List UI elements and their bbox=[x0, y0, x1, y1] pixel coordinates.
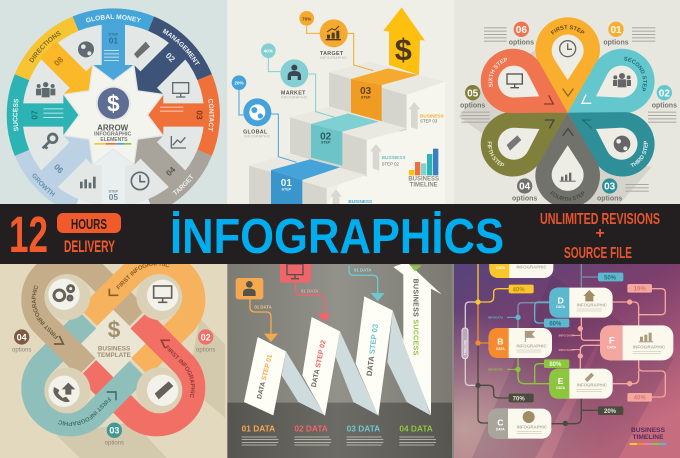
icon: gears bbox=[54, 286, 74, 301]
icon: clock bbox=[131, 172, 149, 190]
badge: 01 options: options bbox=[603, 39, 629, 46]
side label: TIMELINE bbox=[463, 339, 467, 355]
node: global bbox=[232, 75, 271, 139]
icon: monitor bbox=[154, 286, 172, 302]
badge: 04 options: 04 bbox=[519, 182, 531, 193]
step labels bbox=[29, 32, 205, 202]
small node labels: INFODATA bbox=[488, 368, 504, 372]
panel: stair steps infographic bbox=[226, 0, 452, 204]
percentage pills: 60% bbox=[549, 321, 562, 327]
step 3 block: STEP bbox=[361, 96, 371, 100]
panel: folded paper data steps bbox=[225, 264, 452, 458]
chevrons bbox=[544, 89, 592, 136]
filler text blocks bbox=[461, 27, 676, 192]
business success arrow: BUSINESS SUCCESS bbox=[412, 279, 419, 356]
step labels: STEP bbox=[109, 190, 119, 194]
woven bands bbox=[34, 263, 193, 424]
data label 04 bbox=[399, 423, 436, 445]
icon: people bbox=[613, 73, 631, 87]
icon: people bbox=[36, 82, 55, 97]
icon: monitor bbox=[173, 83, 189, 97]
dollar and template title: $ bbox=[108, 316, 121, 342]
icon: phone and arrow bbox=[53, 383, 75, 402]
badge: 03 options: options bbox=[105, 440, 124, 446]
long shadows bbox=[57, 319, 226, 458]
paper step 2 bbox=[302, 317, 340, 416]
ring labels: MANAGEMENT bbox=[162, 28, 200, 65]
card: A: INFOGRAPHIC bbox=[516, 265, 547, 270]
data label 02: 02 DATA bbox=[294, 423, 328, 433]
badge: 03 options bbox=[597, 178, 622, 203]
icon: pencil bbox=[134, 42, 150, 58]
paper step 3: DATA STEP 03 bbox=[365, 323, 380, 377]
icon: line chart bbox=[171, 136, 186, 148]
small arrows and business labels bbox=[330, 102, 444, 205]
centre dollar badge: $ bbox=[107, 91, 120, 117]
yellow arrow with dollar bbox=[383, 7, 425, 75]
card: C: INFOGRAPHIC bbox=[517, 425, 547, 430]
icon: clock bbox=[560, 41, 576, 57]
ring segments bbox=[7, 8, 220, 222]
node: target: INFOGRAPHIC bbox=[320, 56, 347, 60]
business timeline title bbox=[631, 427, 666, 441]
icon: monitor tile with connector bbox=[280, 259, 331, 322]
node: market bbox=[261, 43, 308, 100]
ring labels: GROWTH bbox=[32, 174, 56, 196]
percentage pills: 40% bbox=[634, 396, 646, 402]
badge: 04 options: options bbox=[12, 347, 31, 353]
icon: monitor bbox=[507, 74, 522, 88]
icon: person tile with connector: 01 DATA bbox=[254, 305, 273, 310]
badge: 03 options: 03 bbox=[604, 182, 616, 193]
panel: business timeline flowchart bbox=[452, 264, 680, 458]
node: market: INFOGRAPHIC bbox=[281, 96, 308, 100]
percentage pills: 10% bbox=[634, 287, 646, 293]
badge: 02 options: 02 bbox=[201, 332, 211, 342]
icon: bar chart bbox=[80, 177, 96, 188]
badge: 02 options: options bbox=[196, 347, 215, 353]
badge: 05 options: 05 bbox=[467, 88, 479, 99]
ring labels: DIRECTIONS bbox=[29, 31, 61, 63]
badge: 03 options bbox=[105, 423, 124, 446]
step labels: 08 bbox=[52, 54, 66, 68]
paper step 2: DATA STEP 02 bbox=[311, 340, 328, 388]
step 2 block: STEP bbox=[321, 141, 331, 145]
percentage pills: 20% bbox=[604, 409, 617, 415]
badge: 01 options: 01 bbox=[610, 25, 622, 36]
infographics title: İNFOGRAPHİCS bbox=[170, 210, 504, 264]
ring labels: TARGET bbox=[172, 174, 193, 195]
hours pill bbox=[57, 213, 121, 233]
chevrons bbox=[54, 289, 170, 400]
node: global: INFOGRAPHIC bbox=[244, 135, 271, 139]
centre dollar badge bbox=[96, 86, 131, 121]
card: E: INFOGRAPHIC bbox=[577, 383, 607, 388]
node: global: GLOBAL bbox=[243, 130, 268, 136]
petals bbox=[469, 17, 666, 208]
badge: 02 options: options bbox=[652, 103, 677, 110]
business timeline chart: BUSINESS bbox=[408, 176, 439, 182]
card: B: B bbox=[497, 337, 503, 347]
delivery label: DELIVERY bbox=[64, 237, 115, 256]
paper step 1 bbox=[244, 337, 286, 415]
icon: chart bbox=[560, 173, 576, 182]
badge: 02 options bbox=[652, 85, 677, 110]
card: E: DATA bbox=[556, 386, 566, 390]
business timeline chart bbox=[408, 149, 439, 188]
small arrows and business labels: BUSINESS bbox=[382, 155, 405, 160]
petal labels bbox=[488, 25, 648, 201]
badge: 04 options: options bbox=[512, 196, 537, 203]
step labels: 01 bbox=[109, 35, 118, 45]
small arrows and business labels: BUSINESS bbox=[348, 199, 372, 204]
icon: pencil bbox=[507, 135, 521, 151]
band labels bbox=[32, 264, 195, 426]
data label 03: 03 DATA bbox=[347, 423, 380, 433]
badge: 04 options bbox=[512, 178, 537, 203]
dollar and template title bbox=[97, 316, 131, 359]
plus sign: + bbox=[595, 225, 605, 242]
card: D: DATA bbox=[556, 305, 566, 309]
badge: 04 options bbox=[12, 329, 31, 353]
badge: 05 options bbox=[460, 85, 485, 110]
icon: globe bbox=[614, 136, 630, 152]
badge: 03 options: options bbox=[597, 196, 622, 203]
diagonal shadows bbox=[472, 275, 673, 458]
step 3 block: 03 bbox=[360, 86, 372, 97]
petal labels: SECOND STEP bbox=[624, 56, 647, 92]
data label 02 bbox=[294, 423, 331, 445]
badge: 04 options: 04 bbox=[17, 332, 27, 342]
icon: globe bbox=[78, 41, 94, 57]
data label 01 bbox=[242, 423, 278, 445]
card: D: INFOGRAPHIC bbox=[577, 302, 607, 307]
business success arrow bbox=[393, 262, 442, 415]
card: B bbox=[489, 328, 552, 358]
ring labels: SUCCESS bbox=[12, 98, 18, 132]
card: D bbox=[549, 288, 613, 318]
icon: monitor tile with connector: 01 DATA bbox=[301, 289, 319, 294]
card: E bbox=[549, 369, 613, 399]
business timeline chart: TIMELINE bbox=[410, 182, 438, 188]
card: F bbox=[600, 325, 673, 360]
dollar and template title: TEMPLATE bbox=[97, 352, 131, 359]
banner bbox=[0, 204, 680, 264]
business timeline title: TIMELINE bbox=[632, 434, 664, 441]
card: A: DATA bbox=[496, 266, 506, 270]
small arrows and business labels: STEP 03 bbox=[420, 118, 438, 123]
petal labels: FOURTH STEP bbox=[550, 191, 584, 201]
percentage pills: 50% bbox=[604, 275, 617, 281]
card: A bbox=[489, 249, 553, 278]
card: C bbox=[488, 409, 551, 439]
small node labels: INFODATA bbox=[488, 316, 504, 320]
ring labels: GLOBAL MONEY bbox=[86, 14, 142, 22]
connector lines bbox=[465, 262, 665, 424]
paper step 1: DATA STEP 01 bbox=[256, 354, 274, 400]
business timeline title: BUSINESS bbox=[631, 427, 666, 434]
small arrows and business labels: STEP 02 bbox=[382, 162, 400, 167]
small arrows and business labels: BUSINESS bbox=[420, 113, 444, 118]
petal labels: FIRST STEP bbox=[550, 25, 584, 35]
step labels: 06 bbox=[52, 162, 66, 176]
centre title bbox=[94, 124, 131, 143]
icon discs bbox=[48, 279, 178, 407]
small node labels bbox=[488, 316, 575, 372]
side label bbox=[462, 328, 468, 359]
badge: 06 options: 06 bbox=[516, 25, 527, 36]
node: market: MARKET bbox=[281, 90, 306, 96]
node: target: 70% bbox=[302, 16, 312, 21]
connector lines bbox=[239, 26, 373, 162]
dollar and template title: BUSINESS bbox=[98, 345, 130, 352]
data label 04: 04 DATA bbox=[399, 423, 433, 433]
step labels: 02 bbox=[164, 50, 178, 64]
step arrows bbox=[21, 23, 206, 207]
colour bar bbox=[94, 143, 131, 145]
colour bar bbox=[630, 443, 666, 445]
badge: 06 options: options bbox=[509, 39, 534, 46]
big 12: 12 bbox=[9, 206, 48, 263]
ring labels bbox=[12, 14, 254, 196]
petal labels: THIRD STEP bbox=[630, 141, 648, 168]
badge: 02 options bbox=[196, 329, 215, 353]
step 1 block: 01 bbox=[281, 178, 292, 189]
card: D: D bbox=[558, 295, 564, 305]
step 1 block: STEP bbox=[282, 187, 292, 191]
panel: six petal flower infographic bbox=[453, 0, 680, 204]
centre title: INFOGRAPHIC bbox=[94, 132, 131, 138]
card: C: DATA bbox=[496, 428, 505, 432]
percentage pills: 80% bbox=[549, 362, 562, 368]
card: B: DATA bbox=[496, 347, 505, 351]
petal holes bbox=[492, 34, 643, 191]
connector 3: 01 DATA bbox=[354, 267, 372, 272]
loop hollows bbox=[44, 274, 182, 413]
badge: 03 options: 03 bbox=[109, 426, 119, 436]
step labels: STEP bbox=[109, 32, 119, 36]
data label 01: 01 DATA bbox=[242, 423, 275, 433]
card: F: DATA bbox=[607, 346, 617, 350]
card: F: F bbox=[609, 335, 615, 345]
connector nodes bbox=[475, 299, 632, 426]
band labels: FIRST INFOGRAPHIC bbox=[32, 285, 58, 340]
step labels: 04 bbox=[164, 164, 178, 178]
step labels: 03 bbox=[195, 110, 205, 120]
band labels: FIRST INFOGRAPHIC bbox=[165, 345, 195, 398]
paper folds bbox=[282, 310, 431, 415]
badge: 05 options: options bbox=[460, 103, 485, 110]
card: C: C bbox=[497, 417, 504, 427]
icon: key bbox=[43, 134, 57, 149]
step labels: 07 bbox=[29, 110, 39, 120]
card: E: E bbox=[558, 376, 564, 386]
centre title: ELEMENTS bbox=[100, 137, 128, 143]
petal labels: FIFTH STEP bbox=[488, 142, 504, 166]
petal labels: SIXTH STEP bbox=[488, 58, 507, 87]
node: global: 20% bbox=[234, 81, 245, 86]
paper step 3 bbox=[356, 296, 393, 416]
step 2 block bbox=[290, 107, 407, 177]
hours pill: HOURS bbox=[71, 216, 107, 233]
step 3 block bbox=[327, 62, 445, 205]
centre diamond bbox=[80, 309, 147, 377]
data label 03 bbox=[347, 423, 383, 445]
star centre bbox=[65, 67, 162, 163]
node: target: TARGET bbox=[320, 51, 344, 57]
badge: 01 options bbox=[603, 22, 629, 46]
icon: person tile with connector bbox=[236, 278, 278, 342]
band labels: FIRST INFOGRAPHIC bbox=[116, 264, 170, 290]
badge: 02 options: 02 bbox=[659, 88, 670, 99]
panel: woven loop infographic bbox=[0, 264, 225, 458]
icon: pencil bbox=[155, 381, 173, 399]
yellow arrow with dollar: $ bbox=[395, 33, 412, 67]
small node labels: INFO DATA bbox=[559, 348, 575, 352]
step labels: 05 bbox=[109, 192, 118, 202]
centre title: ARROW bbox=[97, 124, 129, 133]
connector 3 bbox=[349, 265, 385, 301]
band labels: FIRST INFOGRAPHIC bbox=[58, 397, 112, 426]
percentage pills: 40% bbox=[513, 287, 525, 293]
ring labels: CONTACT bbox=[208, 98, 214, 132]
node: target bbox=[299, 11, 348, 60]
text filler lines bbox=[43, 50, 183, 118]
panel: arrow circle infographic bbox=[0, 0, 225, 204]
card: B: INFOGRAPHIC bbox=[516, 343, 547, 348]
source file: SOURCE FILE bbox=[564, 245, 632, 262]
node: market: 40% bbox=[264, 49, 274, 54]
percentage pills bbox=[509, 273, 652, 415]
badge: 06 options bbox=[509, 22, 534, 46]
petal shadows bbox=[459, 50, 652, 205]
step 2 block: 02 bbox=[320, 131, 332, 142]
small node labels: INFO DATA bbox=[559, 334, 575, 338]
percentage pills: 70% bbox=[513, 396, 525, 402]
step 1 block bbox=[249, 154, 367, 205]
card: F: INFOGRAPHIC bbox=[633, 345, 666, 350]
